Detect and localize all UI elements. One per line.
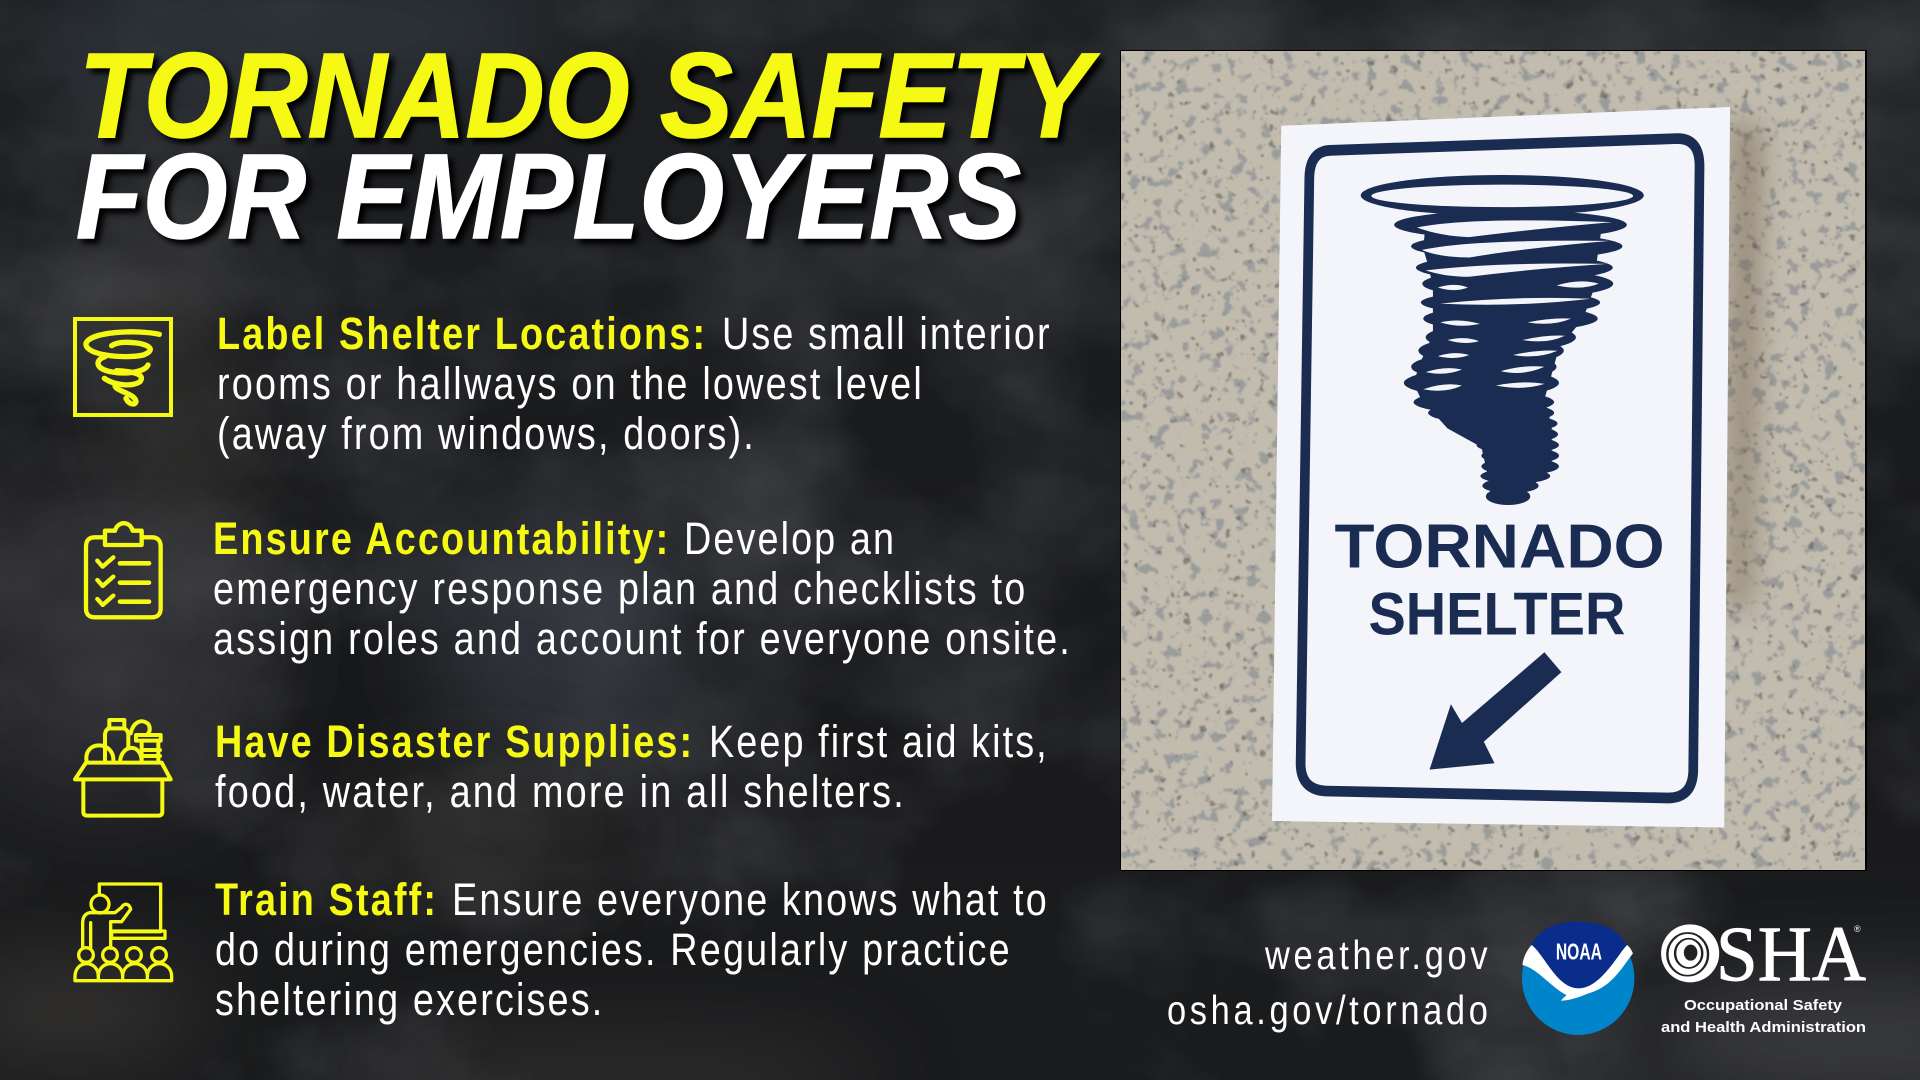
links: weather.gov — [1264, 933, 1488, 979]
title line 1: TORNADO SAFETY — [79, 27, 1099, 163]
text block: train staff — [215, 874, 1047, 1025]
logo: NOAA: NOAA — [1556, 938, 1602, 964]
sign tornado graphic — [1361, 175, 1644, 505]
text block: disaster supplies: Keep first aid kits, — [709, 716, 1047, 767]
sign arrow — [1430, 652, 1561, 770]
text block: ensure accountability: emergency response plan and checklists to — [213, 563, 1025, 614]
title line 2: FOR EMPLOYERS — [76, 128, 1021, 264]
text block: train staff: Train Staff: — [215, 874, 436, 925]
logo: OSHA: ® — [1854, 924, 1861, 934]
photo: tornado shelter sign on concrete — [1120, 50, 1867, 871]
text block: ensure accountability: Ensure Accountability: — [213, 513, 668, 564]
text block: disaster supplies: Have Disaster Supplies: — [215, 716, 692, 767]
text block: disaster supplies — [215, 716, 1047, 817]
sign text — [1335, 524, 1662, 635]
text block: ensure accountability: assign roles and account for everyone onsite. — [213, 613, 1070, 664]
logo: OSHA: Occupational Safety — [1684, 997, 1843, 1014]
text block: disaster supplies: food, water, and more in all shelters. — [215, 766, 904, 817]
logo: OSHA: SHA — [1716, 910, 1866, 997]
icon: tornado in square — [75, 319, 171, 415]
text block: label shelter locations — [217, 308, 1050, 459]
text block: label shelter locations: Label Shelter Locations: — [217, 308, 705, 359]
text block: train staff: sheltering exercises. — [215, 974, 602, 1025]
links: osha.gov/tornado — [1167, 988, 1488, 1034]
sign border — [1301, 139, 1700, 798]
text block: label shelter locations: (away from windows, doors). — [217, 408, 754, 459]
text block: ensure accountability: Develop an — [684, 513, 894, 564]
sign text: TORNADO — [1335, 511, 1665, 581]
icon: clipboard checklist — [86, 523, 161, 617]
text block: ensure accountability — [213, 513, 1070, 664]
logo: OSHA — [1661, 910, 1866, 1036]
icon: supply box — [75, 720, 171, 816]
logo: NOAA — [1522, 922, 1634, 1035]
icon: trainer and audience — [75, 884, 172, 981]
text block: train staff: do during emergencies. Regularly practice — [215, 924, 1010, 975]
links — [1167, 933, 1488, 1034]
sign text: SHELTER — [1368, 581, 1625, 648]
text block: label shelter locations: Use small interior — [722, 308, 1050, 359]
title — [76, 27, 1099, 264]
sign panel — [1272, 107, 1730, 827]
text block: train staff: Ensure everyone knows what to — [452, 874, 1047, 925]
text block: label shelter locations: rooms or hallways on the lowest level — [217, 358, 922, 409]
logo: OSHA: and Health Administration — [1661, 1019, 1866, 1036]
